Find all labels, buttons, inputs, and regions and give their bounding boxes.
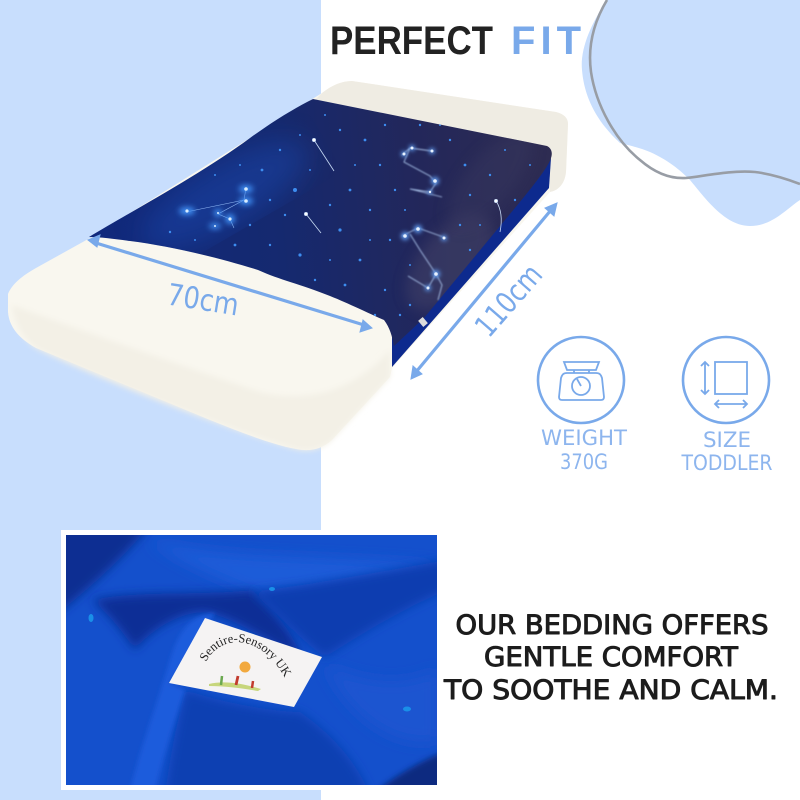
fabric dark band under fold bbox=[92, 590, 302, 660]
icon: size bbox=[683, 337, 769, 423]
sheet tag bbox=[418, 317, 428, 327]
photo frame bbox=[61, 530, 442, 790]
label: 110cm: 110cm bbox=[468, 258, 550, 344]
mattress body bbox=[8, 81, 568, 450]
mattress with sheet bbox=[8, 81, 568, 450]
mattress front edge shading bbox=[12, 305, 390, 450]
fabric base bbox=[66, 535, 437, 785]
decorative curve line: top right bbox=[590, 0, 800, 184]
photo: blue fabric with label bbox=[66, 535, 437, 785]
scattered stars bbox=[169, 114, 531, 316]
sheet top surface bbox=[89, 99, 552, 346]
label: weight: WEIGHT bbox=[541, 426, 627, 450]
constellation left bbox=[179, 185, 253, 229]
shooting stars bbox=[304, 138, 501, 233]
arrow: 110cm length bbox=[411, 203, 557, 379]
label: 70cm: 70cm bbox=[165, 278, 241, 323]
sewn label bbox=[169, 618, 322, 707]
label: weight: 370G bbox=[560, 450, 608, 474]
fabric dark bottom-right corner bbox=[379, 751, 437, 785]
sheet shading bbox=[141, 134, 531, 310]
background panel: left blue bbox=[0, 0, 321, 800]
title: PERFECT bbox=[330, 19, 493, 63]
icon: weight scale bbox=[538, 337, 624, 423]
fabric fold left strip bbox=[130, 613, 215, 790]
body text bbox=[443, 610, 778, 706]
label: size bbox=[681, 428, 772, 475]
fabric light right bbox=[344, 680, 430, 735]
body text: OUR BEDDING OFFERS bbox=[456, 610, 768, 641]
fabric top band highlight bbox=[185, 553, 384, 586]
label logo bbox=[209, 662, 261, 691]
fabric dark top-left bbox=[66, 535, 148, 613]
title: FIT bbox=[511, 19, 581, 63]
label: size: SIZE bbox=[703, 428, 751, 452]
fabric dots bbox=[88, 587, 411, 712]
mattress far end shading bbox=[315, 81, 568, 192]
fabric below-label shade bbox=[164, 690, 368, 785]
body text: TO SOOTHE AND CALM. bbox=[443, 675, 778, 706]
fabric right upper shade bbox=[252, 560, 447, 657]
sheet side band bbox=[392, 158, 551, 367]
sewn label: Sentire-Sensory UK bbox=[200, 634, 292, 678]
body text: GENTLE COMFORT bbox=[484, 642, 739, 673]
constellation right lower bbox=[401, 225, 447, 300]
constellation right upper bbox=[401, 145, 442, 197]
arrow: 70cm width bbox=[88, 235, 372, 332]
decorative blob: top right bbox=[582, 0, 800, 226]
label: size: TODDLER bbox=[681, 451, 772, 475]
label: weight bbox=[541, 426, 627, 474]
